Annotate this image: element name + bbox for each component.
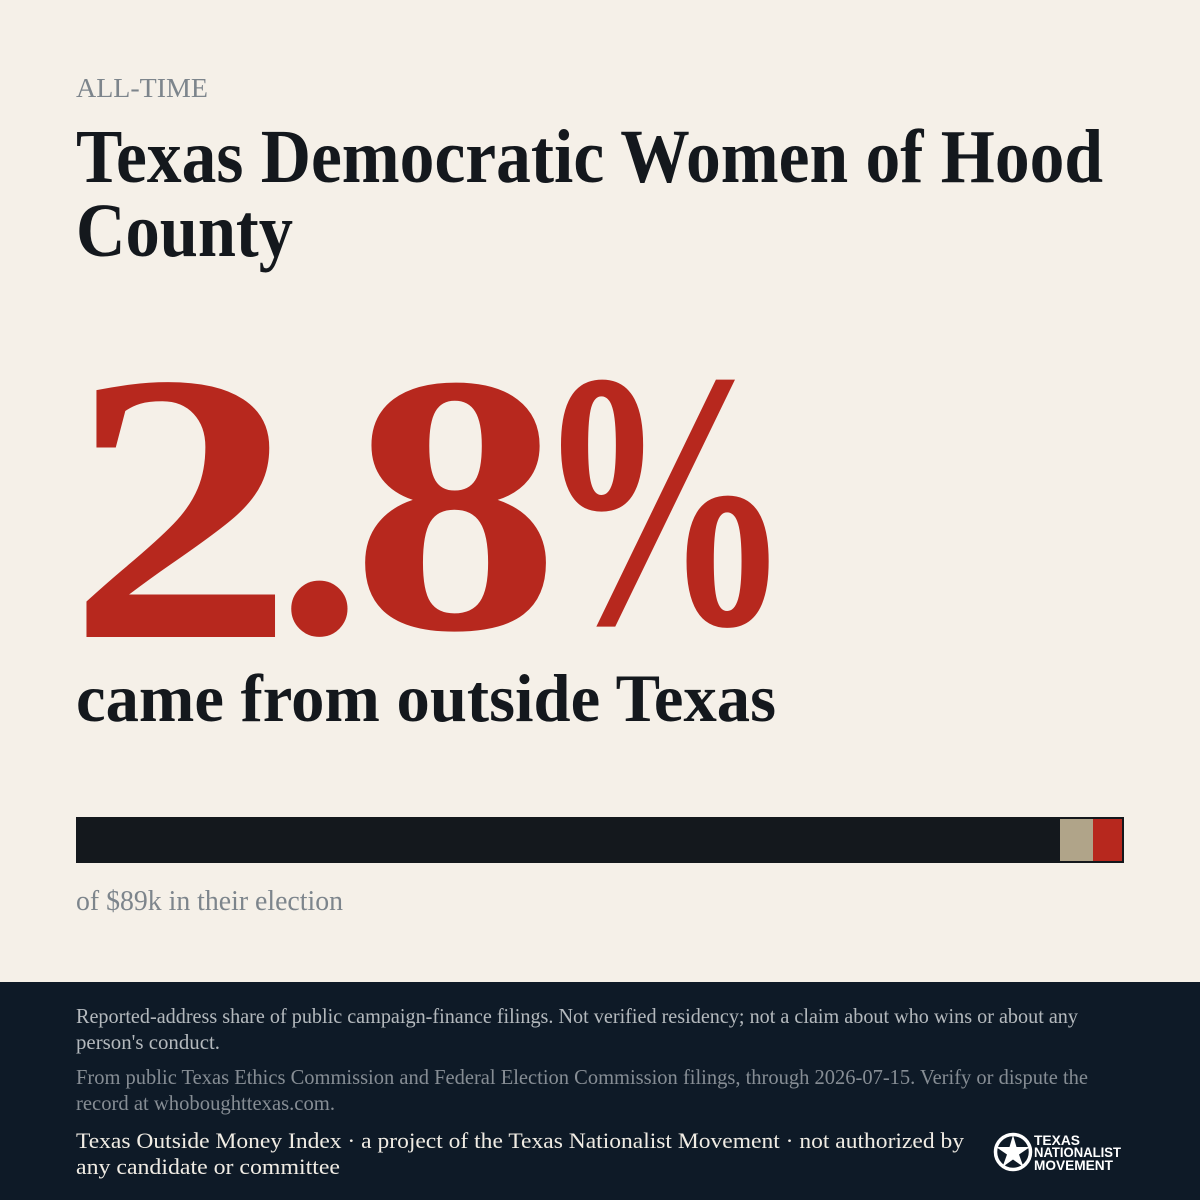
disclaimer text [76, 1004, 1078, 1054]
bar caption: of $89k in their election [76, 885, 343, 917]
subheading: came from outside Texas [76, 660, 776, 736]
source text [76, 1065, 1088, 1115]
logo wordmark: NATIONALIST [1034, 1145, 1122, 1160]
logo wordmark: TEXAS [1034, 1133, 1080, 1148]
big percentage: . [276, 324, 363, 708]
source text: From public Texas Ethics Commission and Federal Election Commission filings, through 2026-07-15. Verify or dispute the [76, 1065, 1088, 1089]
title: Texas Democratic Women of Hood [76, 115, 1103, 199]
eyebrow: ALL-TIME: ALL-TIME [76, 73, 208, 103]
project credit: any candidate or committee [76, 1154, 340, 1179]
logo: Texas Nationalist Movement [996, 1133, 1122, 1173]
disclaimer text: person's conduct. [76, 1030, 220, 1054]
share bar [76, 817, 1124, 863]
logo wordmark: MOVEMENT [1034, 1158, 1114, 1173]
project credit [76, 1128, 965, 1179]
disclaimer text: Reported-address share of public campaign-finance filings. Not verified residency; not a claim about who wins or about any [76, 1004, 1078, 1028]
big percentage: 2 [67, 295, 295, 721]
logo wordmark [1034, 1133, 1122, 1173]
footer panel [0, 982, 1200, 1200]
big percentage [67, 295, 793, 721]
source text: record at whoboughttexas.com. [76, 1091, 335, 1115]
project credit: Texas Outside Money Index · a project of the Texas Nationalist Movement · not authorized by [76, 1128, 965, 1153]
icon: star emblem [996, 1134, 1030, 1170]
big percentage: % [534, 297, 793, 703]
title: County [76, 189, 293, 273]
big percentage: 8 [351, 300, 560, 709]
title [76, 115, 1103, 273]
